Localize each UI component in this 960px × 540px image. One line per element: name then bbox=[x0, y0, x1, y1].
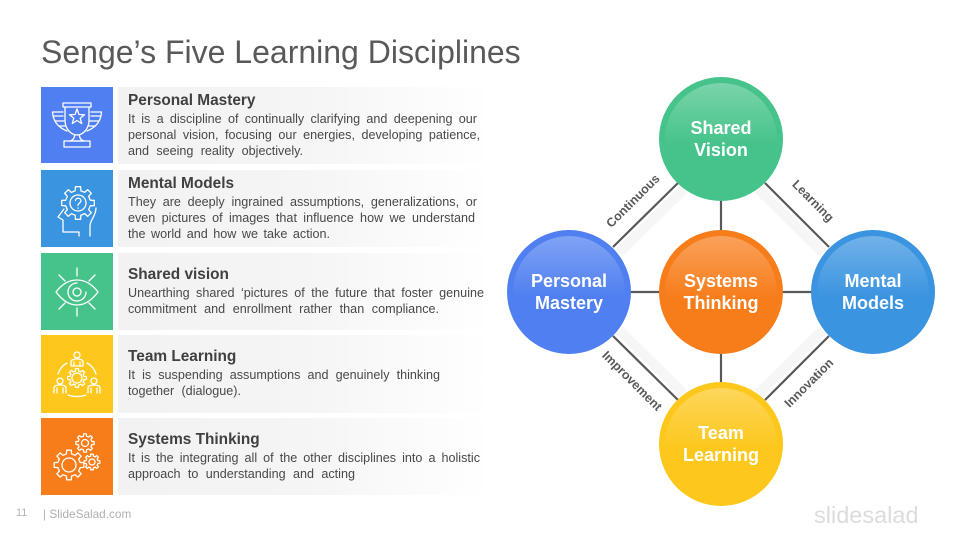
connector label: Innovation: Innovation bbox=[782, 356, 836, 410]
panel: Mental Models bbox=[118, 170, 340, 247]
footer: website: | SlideSalad.com bbox=[43, 507, 131, 521]
page number: 11 bbox=[16, 507, 27, 519]
connector lines bbox=[613, 183, 829, 400]
text: Shared vision line 2: commitment and enrollment rather than compliance. bbox=[128, 302, 439, 316]
circle: Team Learning bbox=[659, 382, 783, 506]
heading: Shared vision: Shared vision bbox=[128, 266, 229, 283]
panel: Systems Thinking bbox=[118, 418, 340, 495]
text background: Mental Models bbox=[118, 170, 490, 247]
panel: Shared vision bbox=[118, 253, 340, 330]
heading: Systems Thinking: Systems Thinking bbox=[128, 431, 260, 448]
connector label: Continuous: Continuous bbox=[604, 171, 663, 230]
text: Personal Mastery line 3: and seeing reality objectively. bbox=[128, 144, 303, 158]
title: Senge’s Five Learning Disciplines bbox=[41, 34, 521, 70]
heading: Mental Models: Mental Models bbox=[128, 175, 234, 192]
connector label: Improvement: Improvement bbox=[599, 348, 665, 414]
circle: Mental Models: Models bbox=[842, 293, 904, 313]
text: Systems Thinking line 1: It is the integrating all of the other disciplines into a holistic bbox=[128, 451, 480, 465]
icon: trophy bbox=[41, 87, 113, 163]
circle: Mental Models bbox=[811, 230, 935, 354]
circle: Systems Thinking: Thinking bbox=[684, 293, 758, 313]
text: Team Learning line 2: together (dialogue). bbox=[128, 384, 241, 398]
heading: Personal Mastery: Personal Mastery bbox=[128, 92, 255, 109]
footer: logo: slidesalad bbox=[814, 502, 919, 528]
circle: Team Learning: Learning bbox=[683, 445, 759, 465]
icon: eye bbox=[41, 253, 113, 330]
text: Mental Models line 2: even pictures of images that influence how we understand bbox=[128, 211, 475, 225]
icon: gears bbox=[41, 418, 113, 495]
circle: Team Learning: Team bbox=[698, 423, 744, 443]
heading: Team Learning: Team Learning bbox=[128, 348, 236, 365]
text background: Shared vision bbox=[118, 253, 490, 330]
circle: Shared Vision: Shared bbox=[690, 118, 752, 138]
text background: Team Learning bbox=[118, 335, 490, 413]
circle: Systems Thinking: Systems bbox=[684, 271, 758, 291]
text: Personal Mastery line 2: personal vision, focusing our energies, developing patience, bbox=[128, 128, 480, 142]
circle: Systems Thinking bbox=[659, 230, 783, 354]
panel: Personal Mastery bbox=[118, 87, 340, 164]
icon: team with gear bbox=[41, 335, 113, 413]
text: Personal Mastery line 1: It is a discipline of continually clarifying and deepening our bbox=[128, 112, 477, 126]
circle: Personal Mastery bbox=[507, 230, 631, 354]
circle: Personal Mastery: Mastery bbox=[535, 293, 603, 313]
text background: Systems Thinking bbox=[118, 418, 490, 495]
circle: Mental Models: Mental bbox=[844, 271, 902, 291]
text: Shared vision line 1: Unearthing shared ‘pictures of the future that foster genuine bbox=[128, 286, 484, 300]
text: Team Learning line 1: It is suspending assumptions and genuinely thinking bbox=[128, 368, 440, 382]
circle: Shared Vision: Vision bbox=[694, 140, 748, 160]
connector label: Learning: Learning bbox=[789, 177, 837, 225]
connector shadows bbox=[619, 189, 823, 394]
circle: Personal Mastery: Personal bbox=[531, 271, 607, 291]
text: Mental Models line 1: They are deeply ingrained assumptions, generalizations, or bbox=[128, 195, 477, 209]
panel: Team Learning bbox=[118, 335, 340, 413]
text: Systems Thinking line 2: approach to understanding and acting bbox=[128, 467, 355, 481]
text background: Personal Mastery bbox=[118, 87, 490, 164]
circle: Shared Vision bbox=[659, 77, 783, 201]
text: Mental Models line 3: the world and how we take action. bbox=[128, 227, 330, 241]
icon: head with gear bbox=[41, 170, 113, 247]
